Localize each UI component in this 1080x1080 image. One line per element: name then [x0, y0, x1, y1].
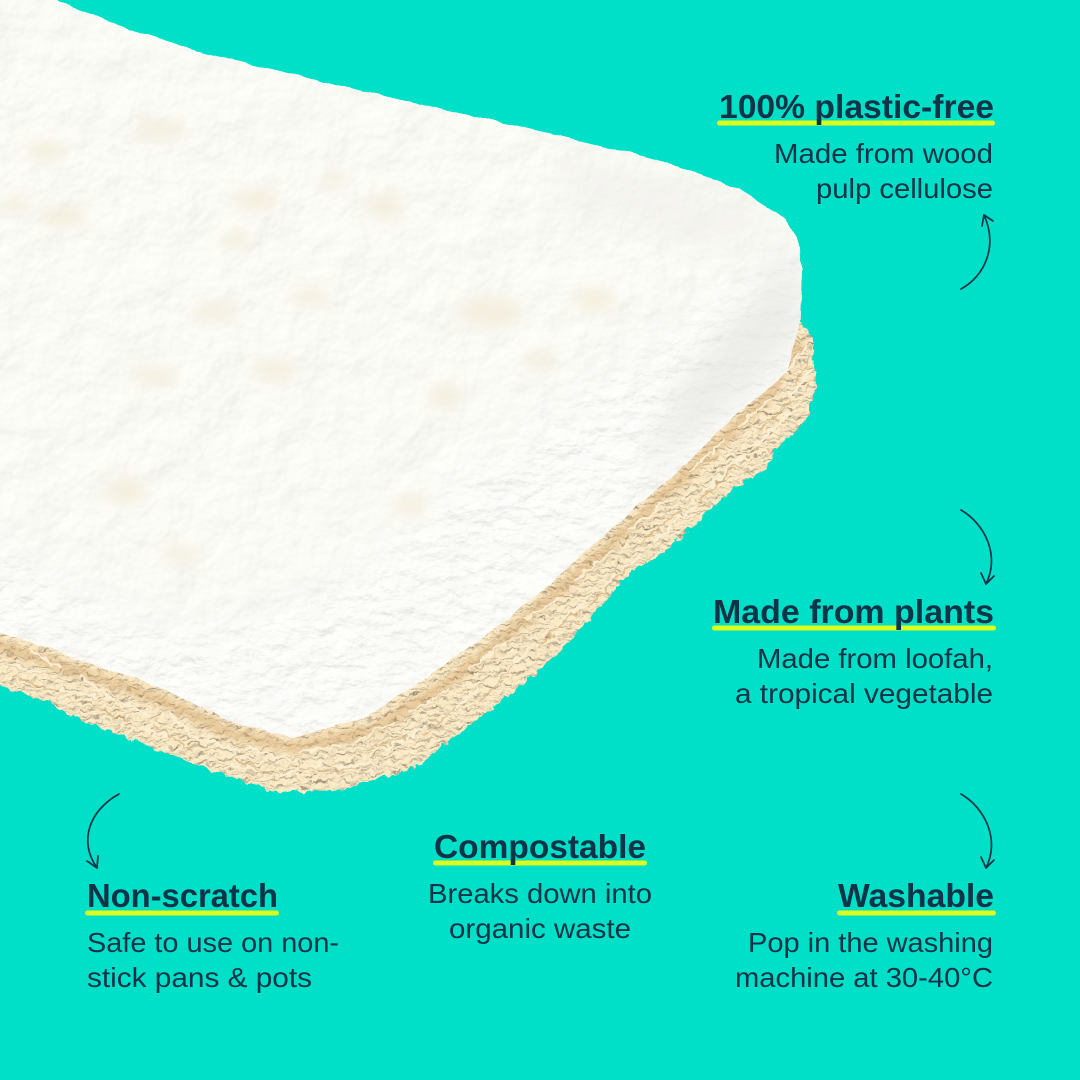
heading: Compostable: [434, 828, 646, 865]
underline: [433, 860, 647, 866]
body line 2: organic waste: [449, 913, 631, 944]
arrow up: [961, 215, 993, 289]
heading: Non-scratch: [87, 877, 278, 914]
underline: [712, 626, 996, 630]
callout: 100% plastic-free: [717, 88, 995, 289]
sponge side face texture: [0, 276, 802, 738]
callout: Washable: [735, 794, 996, 993]
body line 1: Pop in the washing: [748, 927, 993, 958]
arrow down: [961, 510, 994, 584]
callout: Non-scratch: [85, 794, 339, 993]
body line 1: Made from wood: [774, 138, 993, 169]
photo: sponge with loofah backing: [0, 0, 830, 800]
underline: [717, 120, 995, 126]
heading: Washable: [838, 877, 994, 914]
loofah fibres: [10, 345, 810, 775]
body line 1: Safe to use on non-: [87, 927, 339, 958]
body line 2: pulp cellulose: [816, 173, 993, 204]
body line 1: Made from loofah,: [757, 643, 993, 674]
heading: 100% plastic-free: [719, 88, 994, 125]
underline: [85, 910, 279, 916]
heading: Made from plants: [713, 593, 994, 630]
underline: [837, 910, 996, 916]
body line 1: Breaks down into: [428, 878, 652, 909]
body line 2: stick pans & pots: [87, 962, 312, 993]
arrow down: [961, 794, 994, 868]
white cellulose sponge layer: [0, 0, 820, 780]
callout: Compostable: [428, 828, 652, 944]
loofah layer: [0, 300, 830, 800]
callout: Made from plants: [712, 510, 996, 709]
sponge pores: [0, 120, 617, 564]
arrow down: [87, 794, 119, 868]
body line 2: machine at 30-40°C: [735, 962, 993, 993]
sponge corner shading: [658, 267, 802, 450]
body line 2: a tropical vegetable: [735, 678, 993, 709]
